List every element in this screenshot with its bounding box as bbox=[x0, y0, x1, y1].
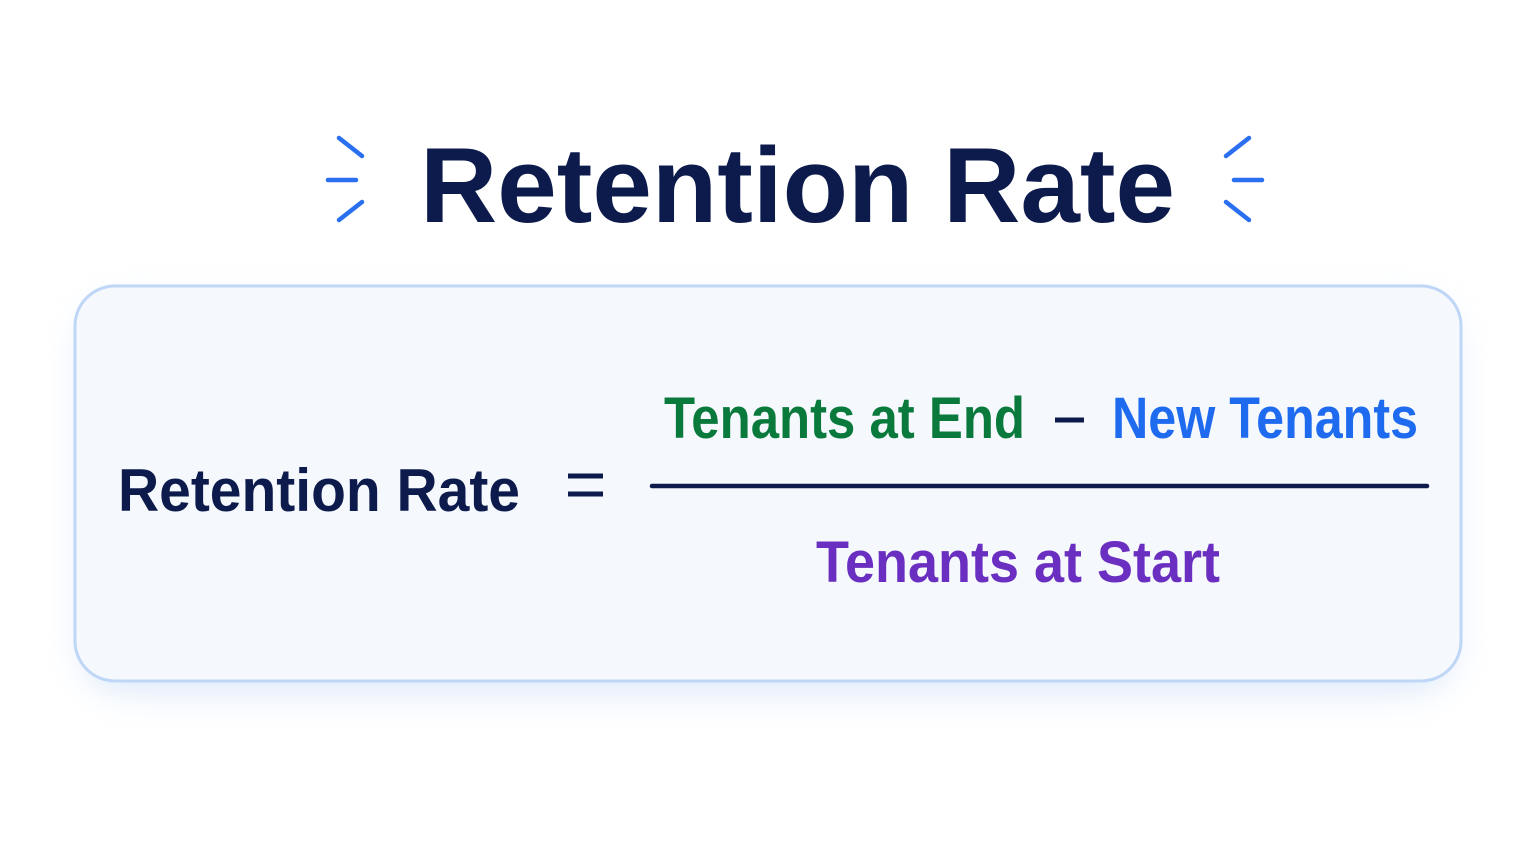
numerator bbox=[664, 386, 1418, 451]
icon: right sparkle bbox=[1226, 138, 1262, 220]
numerator: New Tenants bbox=[1112, 386, 1418, 451]
denominator: Tenants at Start bbox=[816, 530, 1220, 595]
icon: left sparkle bbox=[328, 138, 362, 220]
panel: formula bbox=[75, 286, 1461, 690]
text: left side label: Retention Rate bbox=[118, 457, 520, 524]
title: Retention Rate bbox=[420, 125, 1175, 245]
numerator: Tenants at End bbox=[664, 386, 1025, 451]
fraction line bbox=[652, 484, 1427, 488]
equals sign bbox=[568, 476, 603, 494]
